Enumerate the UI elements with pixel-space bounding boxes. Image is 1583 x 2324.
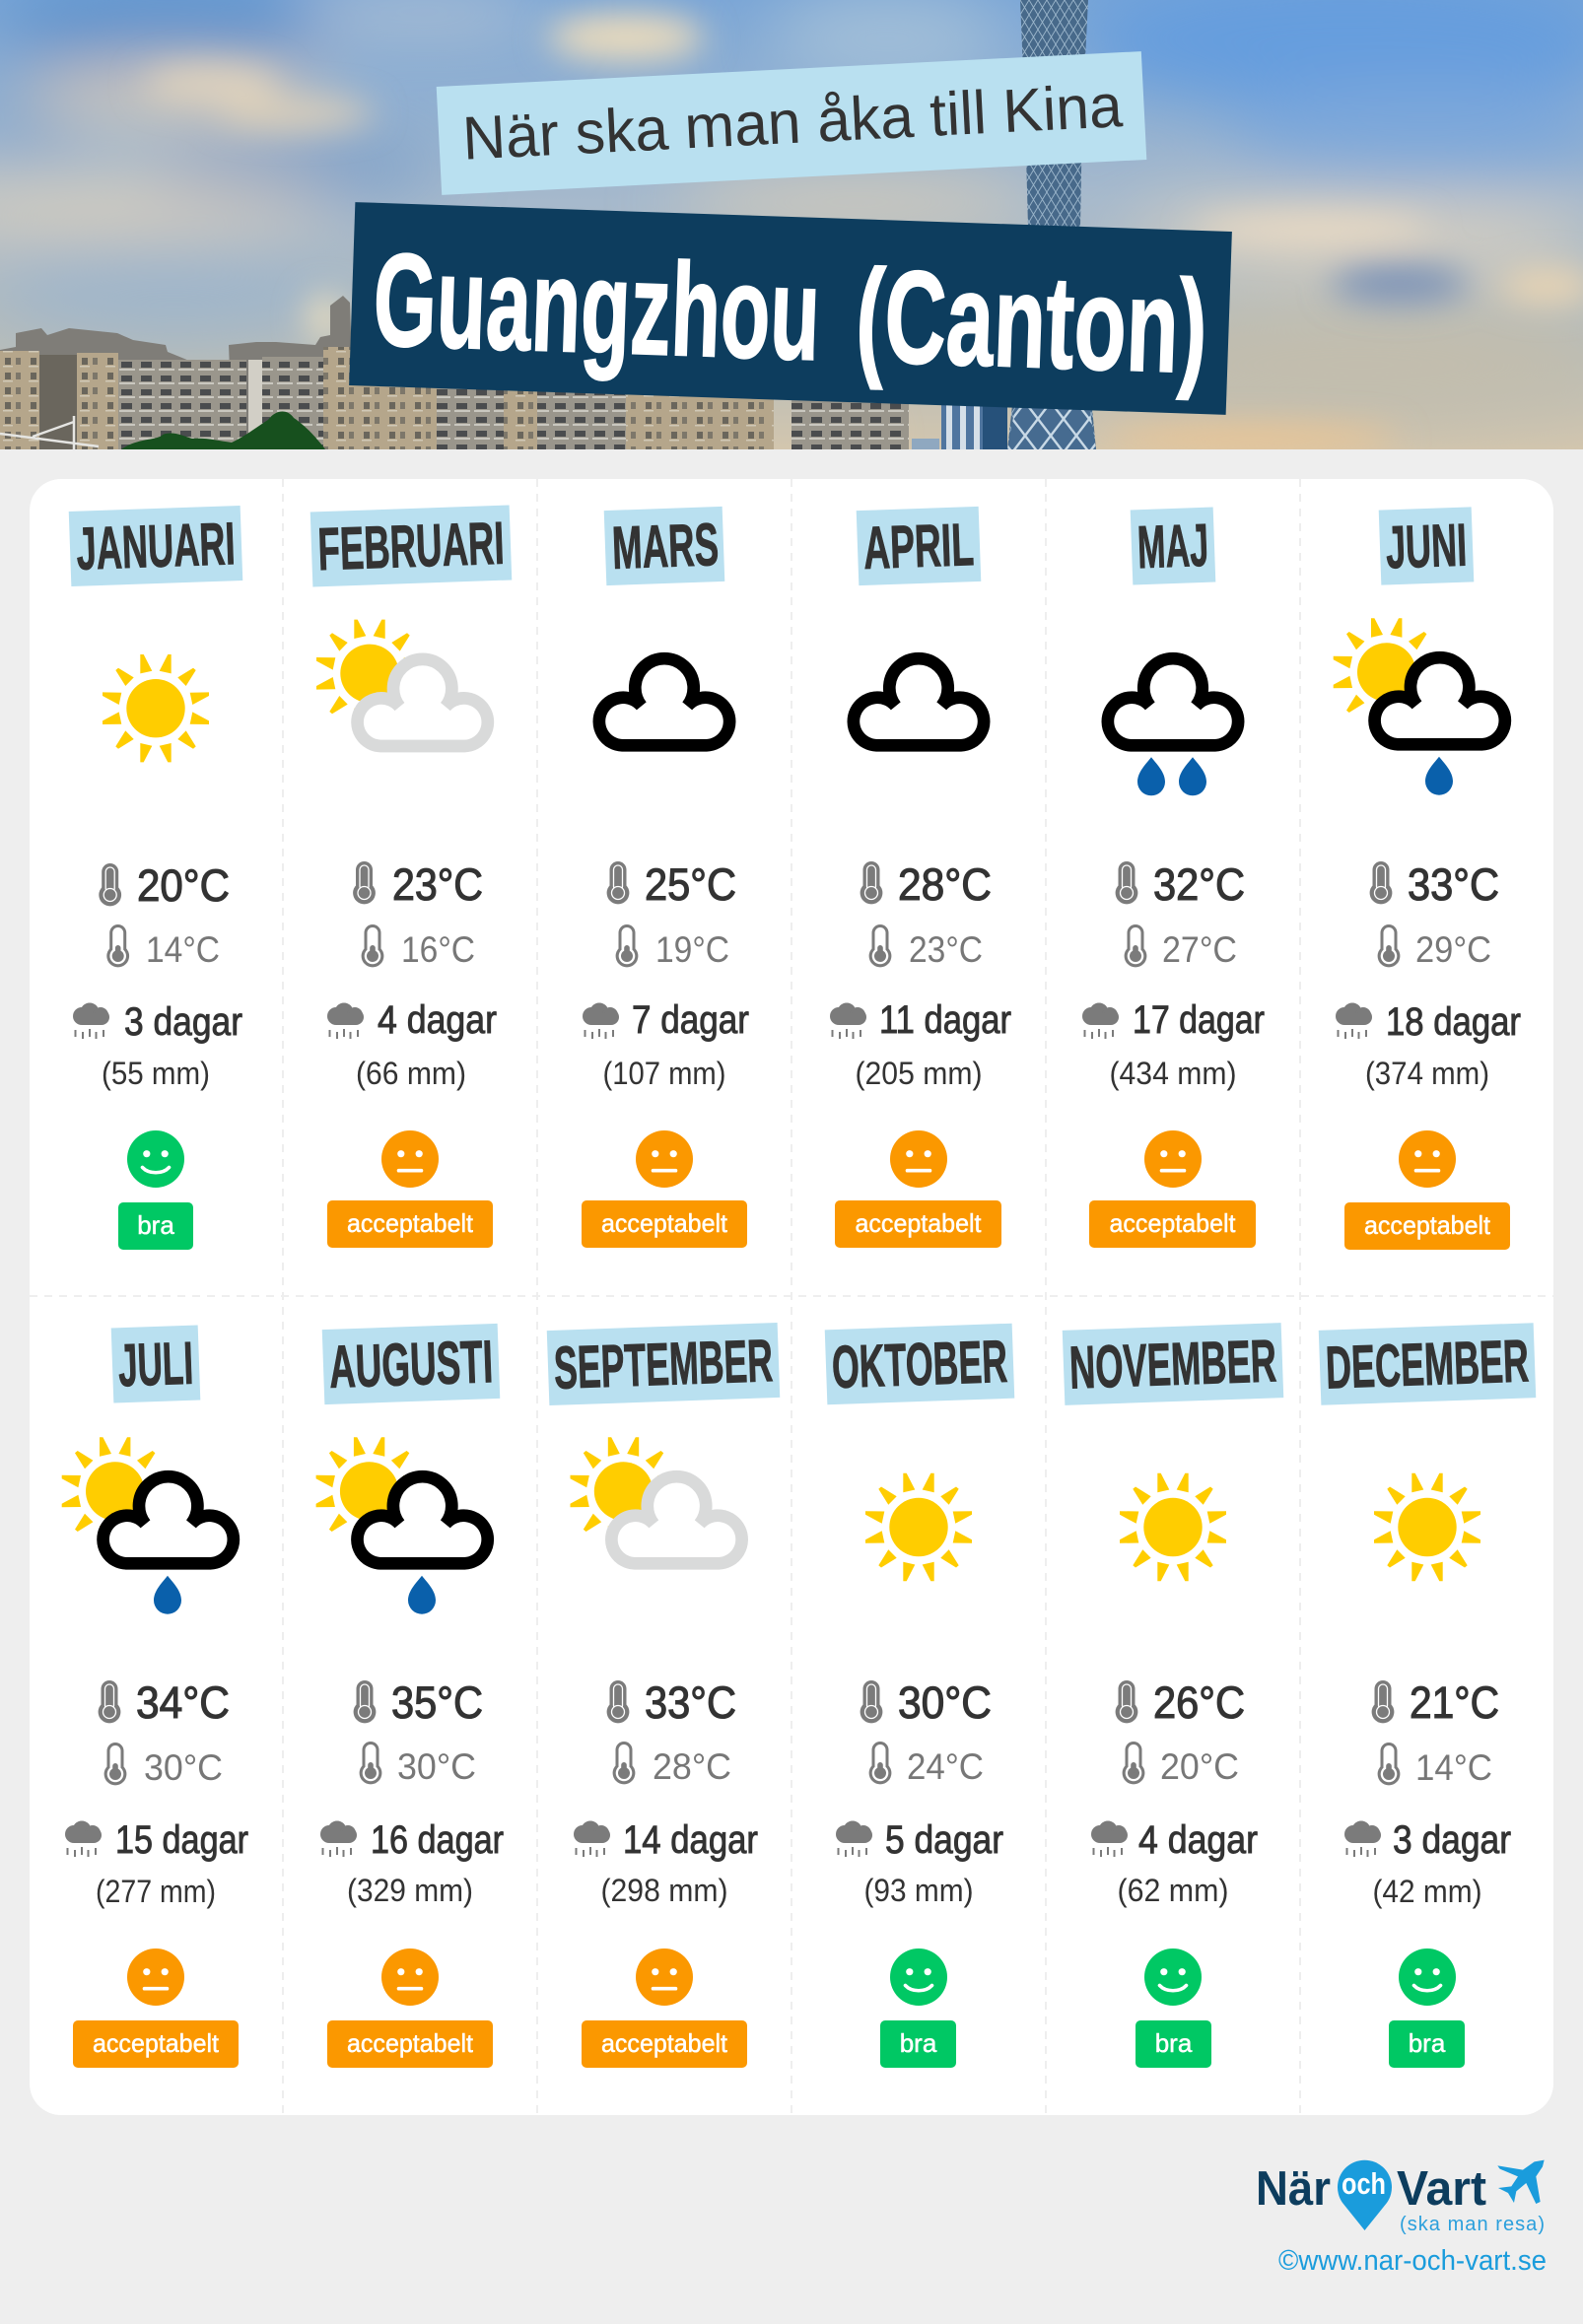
month label: JULI xyxy=(117,1330,194,1399)
rating: bra: bra xyxy=(1155,2028,1193,2058)
buildings left xyxy=(0,296,355,449)
rain days: 14 dagar xyxy=(623,1818,758,1862)
rainfall: (42 mm) xyxy=(1372,1874,1482,1909)
month label xyxy=(69,506,242,586)
high temperature: 23°C xyxy=(392,859,483,910)
logo: När och Vart: Vart xyxy=(1397,2162,1486,2216)
high temperature: 33°C xyxy=(645,1677,736,1728)
month label xyxy=(1379,507,1474,585)
rating: bra: bra xyxy=(137,1210,174,1240)
high temperature xyxy=(1116,1677,1245,1728)
rainfall: (66 mm) xyxy=(356,1056,466,1091)
rainfall: (298 mm) xyxy=(601,1873,727,1908)
icon: sun behind cloud with drop xyxy=(316,1437,488,1614)
low temperature xyxy=(104,1743,223,1788)
rain days xyxy=(65,1818,248,1862)
logo: När och Vart: och xyxy=(1342,2166,1386,2201)
rain days: 5 dagar xyxy=(885,1818,1003,1862)
rainfall: (434 mm) xyxy=(1110,1056,1236,1091)
low temperature xyxy=(106,924,220,970)
icon: sun xyxy=(865,1473,972,1581)
panel: november xyxy=(1063,1323,1283,2068)
low temperature: 29°C xyxy=(1415,929,1491,970)
rating: acceptabelt: acceptabelt xyxy=(601,1208,728,1238)
month label xyxy=(111,1325,200,1403)
high temperature: 20°C xyxy=(137,860,230,911)
high temperature: 30°C xyxy=(898,1677,992,1728)
month label: MARS xyxy=(611,511,720,581)
rating: bra: bra xyxy=(1409,2028,1446,2058)
rainfall: (205 mm) xyxy=(856,1056,982,1091)
rainfall: (329 mm) xyxy=(347,1873,473,1908)
panel: december xyxy=(1319,1323,1536,2068)
low temperature: 14°C xyxy=(1415,1747,1492,1788)
low temperature: 28°C xyxy=(653,1746,731,1787)
month label: NOVEMBER xyxy=(1068,1327,1277,1401)
rainfall: (107 mm) xyxy=(603,1056,725,1091)
rating: bra xyxy=(880,1948,956,2068)
high temperature: 26°C xyxy=(1153,1677,1245,1728)
icon: sun behind grey cloud xyxy=(316,620,488,746)
low temperature xyxy=(1378,924,1491,970)
high temperature xyxy=(99,1677,230,1728)
high temperature: 33°C xyxy=(1408,859,1499,910)
high temperature: 32°C xyxy=(1153,859,1245,910)
month label: OKTOBER xyxy=(831,1328,1008,1401)
month label xyxy=(825,1324,1014,1404)
rain days xyxy=(1336,1000,1521,1044)
website credit: ©www.nar-och-vart.se xyxy=(1278,2245,1547,2277)
rating: acceptabelt: acceptabelt xyxy=(93,2028,220,2058)
rain days: 11 dagar xyxy=(879,998,1011,1042)
rain days xyxy=(73,1000,242,1044)
low temperature: 20°C xyxy=(1160,1746,1239,1787)
icon: sun xyxy=(103,654,209,762)
title band xyxy=(349,202,1232,415)
icon: sun xyxy=(1120,1473,1226,1581)
rating: acceptabelt xyxy=(73,1948,239,2068)
month label xyxy=(604,507,724,585)
month label xyxy=(310,505,512,587)
rating: acceptabelt xyxy=(835,1130,1001,1248)
rating: acceptabelt xyxy=(582,1948,747,2068)
rain days xyxy=(830,998,1011,1042)
high temperature: 21°C xyxy=(1410,1677,1499,1728)
rating: acceptabelt xyxy=(327,1130,493,1248)
high temperature xyxy=(99,860,230,911)
low temperature: 30°C xyxy=(144,1747,223,1788)
rating: acceptabelt xyxy=(1344,1130,1510,1250)
high temperature xyxy=(353,859,483,910)
panel: januari xyxy=(69,506,242,1250)
low temperature xyxy=(613,1742,731,1787)
rain days: 4 dagar xyxy=(378,998,497,1042)
low temperature xyxy=(360,1742,476,1787)
rating: acceptabelt: acceptabelt xyxy=(1110,1208,1236,1238)
trees xyxy=(121,411,325,449)
low temperature xyxy=(869,924,983,970)
low temperature: 19°C xyxy=(655,929,729,970)
rain days xyxy=(1082,998,1265,1042)
icon: cloud xyxy=(599,658,729,745)
month label: MAJ xyxy=(1136,512,1209,581)
low temperature xyxy=(1123,1742,1239,1787)
panel: april xyxy=(830,507,1011,1248)
panel: maj xyxy=(1082,508,1265,1248)
icon: sun behind grey cloud xyxy=(570,1437,742,1563)
logo: När och Vart: När xyxy=(1256,2162,1331,2216)
rainfall: (277 mm) xyxy=(96,1874,216,1909)
low temperature xyxy=(869,1742,984,1787)
logo: När och Vart xyxy=(1256,2160,1545,2235)
low temperature: 27°C xyxy=(1162,929,1237,970)
low temperature xyxy=(1378,1743,1492,1788)
panel: augusti xyxy=(316,1324,504,2068)
buildings under the title band xyxy=(348,379,1007,449)
icon: airplane xyxy=(1497,2160,1545,2204)
high temperature xyxy=(1116,859,1245,910)
rating: bra xyxy=(1136,1948,1211,2068)
rain days xyxy=(320,1818,504,1862)
high temperature xyxy=(607,1677,736,1728)
icon: cloud xyxy=(854,658,984,745)
panel: juni xyxy=(1334,507,1521,1250)
rainfall: (93 mm) xyxy=(863,1873,974,1908)
panel: september xyxy=(547,1323,780,2068)
rating: acceptabelt: acceptabelt xyxy=(856,1208,982,1238)
low temperature xyxy=(1125,924,1237,970)
low temperature: 14°C xyxy=(146,929,220,970)
month label xyxy=(857,507,981,585)
title band: (Canton) xyxy=(854,242,1209,401)
month label: FEBRUARI xyxy=(316,510,506,582)
high temperature xyxy=(354,1677,483,1728)
subtitle band: När ska man åka till Kina xyxy=(461,72,1125,173)
logo: När och Vart: (ska man resa) xyxy=(1400,2214,1545,2235)
low temperature: 23°C xyxy=(909,929,983,970)
low temperature: 24°C xyxy=(907,1746,984,1787)
low temperature xyxy=(616,924,729,970)
rating: acceptabelt xyxy=(327,1948,493,2068)
rain days: 15 dagar xyxy=(115,1818,248,1862)
icon: sun behind cloud with drop xyxy=(1334,618,1505,795)
icon: Canton Tower xyxy=(1007,0,1096,449)
rain days xyxy=(836,1818,1003,1862)
high temperature xyxy=(860,1677,992,1728)
rain days xyxy=(574,1818,758,1862)
month label: JUNI xyxy=(1385,512,1468,581)
hero photo: Guangzhou skyline xyxy=(0,0,1583,450)
low temperature xyxy=(362,924,475,970)
rainfall: (55 mm) xyxy=(102,1056,210,1091)
rating: bra xyxy=(118,1130,193,1250)
rain days: 7 dagar xyxy=(632,998,749,1042)
rain days: 4 dagar xyxy=(1138,1818,1258,1862)
rating: bra xyxy=(1389,1948,1465,2068)
icon: sun xyxy=(1374,1473,1480,1581)
rain days: 17 dagar xyxy=(1133,998,1265,1042)
high temperature: 28°C xyxy=(898,859,992,910)
rain days xyxy=(1344,1818,1511,1862)
month label: JANUARI xyxy=(75,510,237,582)
rating: acceptabelt: acceptabelt xyxy=(1364,1210,1491,1240)
rain days: 3 dagar xyxy=(1393,1818,1511,1862)
rain days: 3 dagar xyxy=(124,1000,242,1044)
low temperature: 30°C xyxy=(397,1746,476,1787)
high temperature xyxy=(1372,1677,1499,1728)
month label xyxy=(322,1324,500,1404)
rating: acceptabelt xyxy=(582,1130,747,1248)
high temperature xyxy=(607,859,736,910)
high temperature xyxy=(1370,859,1499,910)
high temperature: 25°C xyxy=(645,859,736,910)
rain days xyxy=(1091,1818,1258,1862)
rain days xyxy=(327,998,497,1042)
month label: AUGUSTI xyxy=(328,1328,494,1401)
panel: februari xyxy=(310,505,512,1248)
rating: acceptabelt: acceptabelt xyxy=(347,1208,474,1238)
rainfall: (62 mm) xyxy=(1118,1873,1228,1908)
rating: acceptabelt: acceptabelt xyxy=(347,2028,474,2058)
rain days: 18 dagar xyxy=(1386,1000,1521,1044)
panel: oktober xyxy=(825,1324,1014,2068)
month label xyxy=(1131,508,1215,584)
high temperature: 34°C xyxy=(136,1677,230,1728)
month label: APRIL xyxy=(862,511,975,581)
title band: Guangzhou xyxy=(372,227,822,388)
month label: SEPTEMBER xyxy=(553,1327,774,1401)
month label xyxy=(1063,1323,1283,1405)
panel: juli xyxy=(62,1325,248,2068)
icon: map pin xyxy=(1338,2160,1392,2230)
rating: bra: bra xyxy=(900,2028,937,2058)
high temperature xyxy=(860,859,992,910)
rain days: 16 dagar xyxy=(371,1818,504,1862)
panel: months card xyxy=(30,479,1553,2115)
subtitle band xyxy=(437,51,1146,195)
panel: mars xyxy=(582,507,749,1248)
rating: acceptabelt xyxy=(1089,1130,1256,1248)
rating: acceptabelt: acceptabelt xyxy=(601,2028,728,2058)
high temperature: 35°C xyxy=(391,1677,483,1728)
low temperature: 16°C xyxy=(401,929,475,970)
icon: sun behind cloud with drop xyxy=(62,1437,234,1614)
month label xyxy=(547,1323,780,1405)
rain days xyxy=(583,998,749,1042)
rainfall: (374 mm) xyxy=(1365,1056,1489,1091)
icon: cloud with two drops xyxy=(1108,658,1238,795)
